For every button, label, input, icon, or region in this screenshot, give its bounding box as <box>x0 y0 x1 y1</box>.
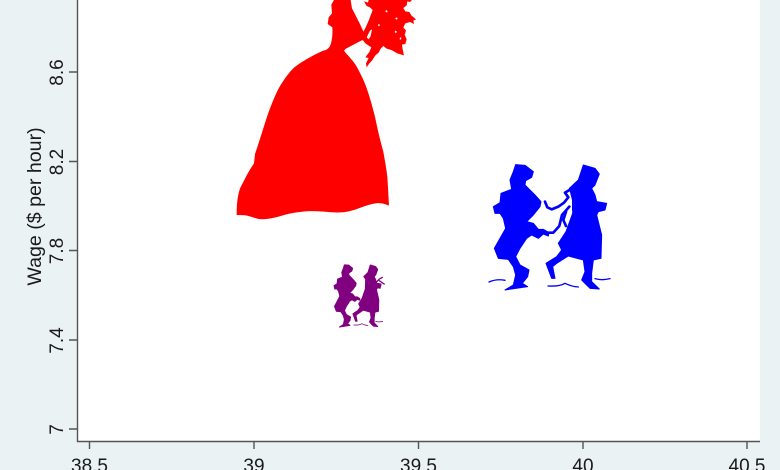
man <box>334 265 360 327</box>
bouquet <box>361 0 416 67</box>
x axis with ticks <box>77 442 760 449</box>
marker: red lady silhouette <box>237 0 416 219</box>
x axis tick labels <box>71 456 765 470</box>
y axis tick labels: 8.2 <box>47 149 68 175</box>
marker: purple small dancing couple silhouette <box>334 265 384 327</box>
woman <box>353 265 381 326</box>
man <box>493 165 549 290</box>
gown and torso <box>237 0 389 219</box>
y axis tick labels <box>47 59 68 435</box>
y axis tick labels: 7.8 <box>47 238 68 264</box>
y axis tick labels: 7 <box>47 424 68 435</box>
y axis tick labels: 7.4 <box>47 327 68 354</box>
ground marks <box>354 321 383 326</box>
ribbons <box>540 189 573 233</box>
y axis with ticks <box>69 0 78 442</box>
y axis title: Wage ($ per hour) <box>24 127 46 286</box>
bouquet speckle <box>367 10 401 40</box>
ground marks <box>548 279 610 287</box>
y axis tick labels: 8.6 <box>47 59 68 86</box>
woman <box>546 165 607 289</box>
marker: blue dancing couple silhouette <box>489 165 610 290</box>
ribbons <box>376 277 384 288</box>
